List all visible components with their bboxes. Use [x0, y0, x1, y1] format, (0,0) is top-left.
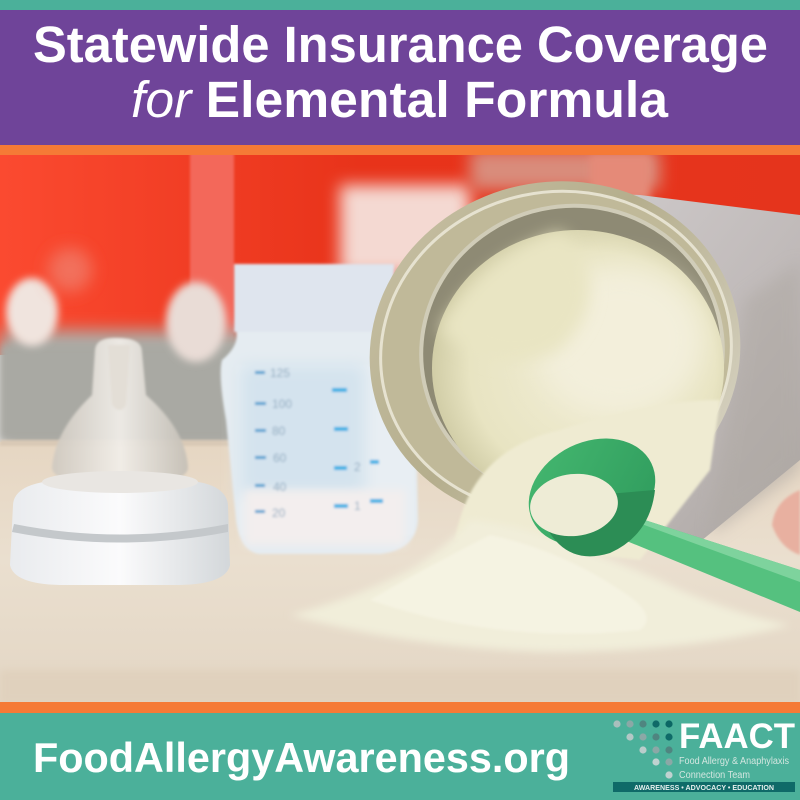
FAACT logo: [613, 717, 795, 792]
photo: formula can, bottle and nipple: [0, 147, 800, 704]
bottle scale numbers: 60: [273, 451, 287, 465]
hand at right edge: [772, 490, 800, 555]
bottle scale numbers: 100: [272, 397, 292, 411]
can rim: [370, 181, 740, 504]
website url: FoodAllergyAwareness.org: [33, 734, 570, 781]
bottle scale numbers: 2: [354, 460, 361, 474]
title line 1: Statewide Insurance Coverage: [33, 16, 768, 73]
table surface: [0, 442, 800, 704]
bottle scale marks: [255, 371, 383, 513]
powder inside can: [432, 230, 724, 560]
measuring scoop: [528, 438, 800, 612]
baby bottle: [221, 264, 418, 554]
logo subtitle: Food Allergy & Anaphylaxis: [679, 756, 789, 767]
formula can body: [633, 194, 800, 539]
FAACT logo: AWARENESS • ADVOCACY • EDUCATION: [634, 785, 774, 792]
bottle collar: [10, 471, 230, 585]
logo dots: [613, 720, 673, 779]
logo wordmark: FAACT: [679, 717, 795, 756]
powder pile: [300, 538, 780, 653]
orange divider top: [0, 145, 800, 155]
bottle scale numbers: [270, 366, 361, 520]
bottle scale numbers: 20: [272, 506, 286, 520]
logo tagline bar: [613, 782, 795, 792]
title line 2: for Elemental Formula: [131, 71, 669, 128]
bottle scale numbers: 1: [354, 499, 361, 513]
footer band: [0, 713, 800, 800]
photo background: red wall: [0, 150, 800, 450]
bottle scale numbers: 125: [270, 366, 290, 380]
FAACT logo: Connection Team: [679, 770, 750, 781]
bottle scale numbers: 80: [272, 424, 286, 438]
title banner: [0, 10, 800, 145]
bottle scale numbers: 40: [273, 480, 287, 494]
bottle nipple: [52, 338, 188, 487]
top teal band: [0, 0, 800, 10]
orange divider bottom: [0, 702, 800, 713]
